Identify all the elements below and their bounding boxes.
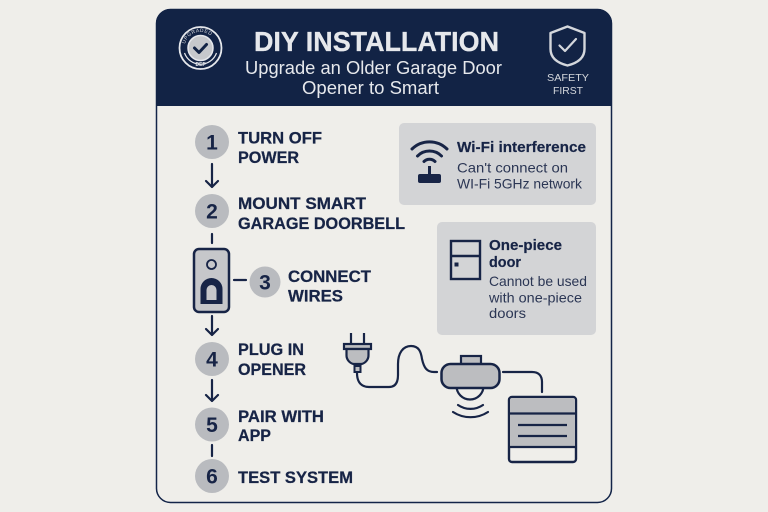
step 5: 5 bbox=[206, 414, 218, 437]
step 6 bbox=[195, 459, 353, 493]
icon: certification badge bbox=[178, 26, 222, 70]
step 5 bbox=[195, 408, 324, 445]
subtitle: Upgrade an Older Garage Door bbox=[245, 58, 502, 78]
icon: smart doorbell bbox=[194, 249, 229, 312]
step 4: PLUG IN bbox=[238, 341, 304, 359]
step 6: 6 bbox=[206, 466, 218, 488]
step 5: PAIR WITH bbox=[238, 408, 324, 426]
callout: Wi-Fi interference bbox=[399, 123, 596, 205]
arrow: step 4 to 5 bbox=[206, 380, 218, 401]
safety first label: FIRST bbox=[553, 85, 584, 97]
power cord bbox=[357, 346, 437, 387]
step 3: 3 bbox=[259, 272, 271, 294]
step 2: 2 bbox=[206, 200, 218, 224]
step 4: OPENER bbox=[238, 361, 306, 379]
step 3: WIRES bbox=[288, 288, 343, 306]
icon: smart opener bbox=[442, 356, 500, 417]
illustration: plug, opener and garage door bbox=[344, 333, 576, 462]
connector: step 5 to 6 bbox=[211, 445, 213, 456]
wire to garage door bbox=[503, 372, 542, 392]
step 4: 4 bbox=[206, 348, 218, 372]
step 1 bbox=[195, 125, 322, 167]
icon: door bbox=[451, 241, 480, 279]
arrow: doorbell to step 4 bbox=[206, 316, 218, 335]
step 2 bbox=[195, 194, 405, 233]
safety first label bbox=[547, 72, 589, 97]
icon: safety shield bbox=[550, 26, 584, 66]
title: DIY INSTALLATION bbox=[254, 26, 499, 57]
safety first label: SAFETY bbox=[547, 72, 589, 84]
callout: One-piece door: doors bbox=[489, 305, 526, 321]
step 6: TEST SYSTEM bbox=[238, 469, 353, 487]
icon: certification badge: DEF bbox=[196, 62, 206, 68]
step 5: APP bbox=[238, 427, 271, 445]
panel: main card bbox=[156, 8, 612, 504]
header band bbox=[156, 9, 612, 106]
callout: Wi-Fi interference: Can't connect on bbox=[457, 160, 568, 176]
step 1: 1 bbox=[206, 132, 218, 154]
icon: Wi-Fi router bbox=[412, 142, 447, 183]
step 1: POWER bbox=[238, 149, 299, 167]
connector: doorbell to step 3 bbox=[234, 279, 246, 281]
icon: plug bbox=[344, 333, 371, 372]
callout: One-piece door: One-piece bbox=[489, 237, 562, 254]
step 3: CONNECT bbox=[288, 268, 371, 286]
subtitle: Opener to Smart bbox=[302, 78, 439, 98]
callout: One-piece door: door bbox=[489, 254, 521, 271]
icon: garage door unit bbox=[509, 397, 576, 462]
callout: One-piece door: with one-piece bbox=[488, 290, 582, 306]
step 4 bbox=[195, 341, 306, 379]
step 2: MOUNT SMART bbox=[238, 195, 366, 213]
connector: step 2 to doorbell bbox=[211, 234, 213, 243]
callout: Wi-Fi interference: Wi-Fi interference bbox=[457, 139, 586, 156]
icon: certification badge: UPGRADED bbox=[182, 28, 212, 44]
callout: One-piece door: Cannot be used bbox=[489, 273, 587, 289]
callout: Wi-Fi interference: WI-Fi 5GHz network bbox=[457, 176, 583, 192]
step 1: TURN OFF bbox=[238, 130, 322, 148]
arrow: step 1 to 2 bbox=[206, 164, 218, 187]
callout: One-piece door bbox=[437, 222, 596, 335]
step 2: GARAGE DOORBELL bbox=[238, 215, 405, 233]
step 3 bbox=[250, 266, 371, 306]
subtitle bbox=[245, 58, 502, 98]
